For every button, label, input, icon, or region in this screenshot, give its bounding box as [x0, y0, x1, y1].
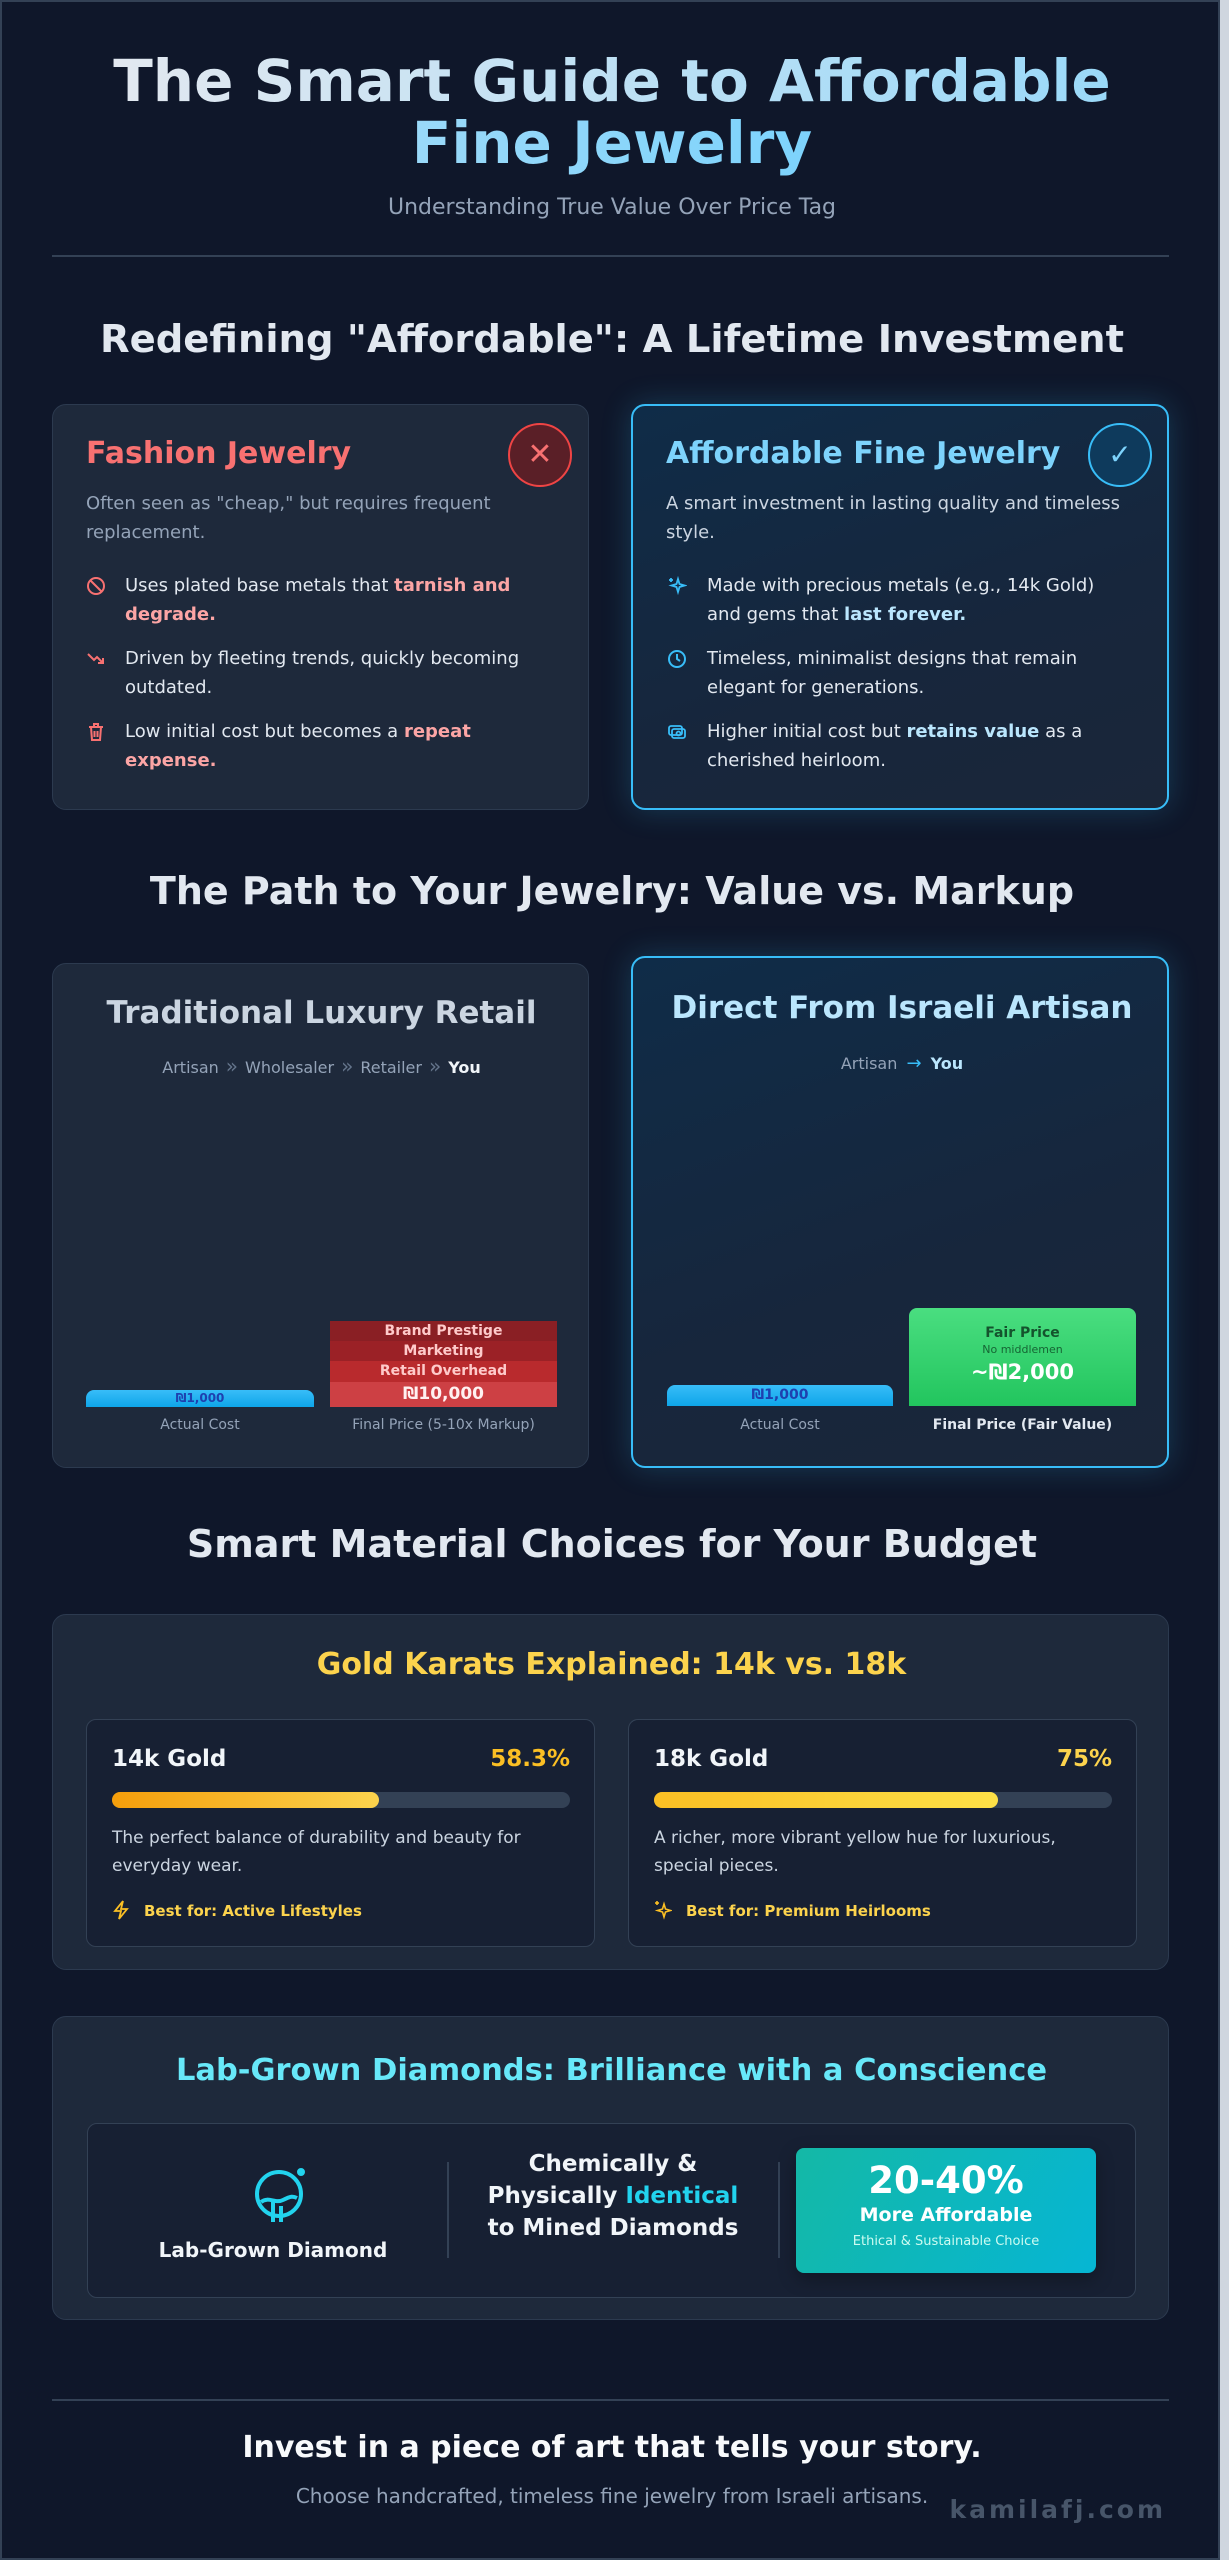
- panel: direct from artisan: [631, 956, 1169, 1468]
- card: 14k: 58.3%: [490, 1746, 570, 1772]
- bar: final price stack: ₪10,000: [403, 1384, 484, 1404]
- card: 14k: 14k Gold: [112, 1746, 226, 1772]
- callout: affordability: Ethical & Sustainable Choice: [853, 2234, 1039, 2249]
- progress bar: [112, 1792, 570, 1808]
- icon label: Lab-Grown Diamond: [159, 2238, 387, 2262]
- bar: actual cost: [86, 1390, 314, 1407]
- bar labels: [160, 1417, 535, 1433]
- bar labels: Final Price (5-10x Markup): [352, 1417, 535, 1433]
- panel: lab-grown diamonds: [52, 2016, 1169, 2320]
- bar: actual cost: [667, 1385, 893, 1406]
- card title: Traditional Luxury Retail: [106, 995, 536, 1031]
- bar: fair price: Fair Price: [985, 1325, 1060, 1341]
- title: The Smart Guide to Affordable: [113, 47, 1111, 115]
- title: Fine Jewelry: [412, 109, 812, 177]
- card title: Direct From Israeli Artisan: [672, 990, 1132, 1026]
- bullet list: Driven by fleeting trends, quickly becoming outdated.: [125, 648, 519, 698]
- bar labels: Final Price (Fair Value): [933, 1417, 1112, 1433]
- subtitle: Understanding True Value Over Price Tag: [388, 195, 836, 220]
- bar: fair price: No middlemen: [982, 1343, 1063, 1356]
- best for: Best for: Premium Heirlooms: [686, 1902, 931, 1920]
- heading: path to jewelry: The Path to Your Jewelry: Value vs. Markup: [150, 869, 1074, 913]
- card: 14k: [86, 1719, 595, 1947]
- panel: fashion jewelry: [52, 404, 589, 810]
- card: 18k: [628, 1719, 1137, 1947]
- title: [113, 47, 1111, 177]
- panel title: Lab-Grown Diamonds: Brilliance with a Conscience: [176, 2053, 1047, 2088]
- card title: Fashion Jewelry: [86, 436, 351, 471]
- description: A smart investment in lasting quality and timeless style.: [666, 493, 1120, 543]
- icon: flask: [255, 2168, 305, 2222]
- identical text: to Mined Diamonds: [488, 2215, 738, 2241]
- bar: final price stack: Brand Prestige: [385, 1323, 502, 1339]
- icon: x circle: ✕: [527, 437, 553, 472]
- bar: actual cost: ₪1,000: [752, 1387, 808, 1403]
- footer headline: Invest in a piece of art that tells your story.: [242, 2430, 982, 2465]
- bullet list: Higher initial cost but retains value as a cherished heirloom.: [707, 721, 1082, 771]
- bullet list: Made with precious metals (e.g., 14k Gold) and gems that last forever.: [707, 575, 1094, 625]
- identical text: Chemically &: [529, 2151, 697, 2177]
- identical text: [488, 2151, 738, 2241]
- bar: actual cost: ₪1,000: [176, 1391, 224, 1405]
- card: 18k: 18k Gold: [654, 1746, 768, 1772]
- bullet list: Low initial cost but becomes a repeat expense.: [125, 721, 471, 771]
- watermark: kamilafj.com: [949, 2495, 1166, 2524]
- panel: affordable fine jewelry: [631, 404, 1169, 810]
- flow: chain: Artisan » Wholesaler » Retailer » You: [162, 1054, 481, 1078]
- panel: gold karats: [52, 1614, 1169, 1970]
- callout: affordability: More Affordable: [860, 2204, 1032, 2226]
- card: 18k: 75%: [1057, 1746, 1112, 1772]
- bar: fair price: ~₪2,000: [971, 1360, 1074, 1384]
- heading: redefining affordable: Redefining "Affordable": A Lifetime Investment: [100, 317, 1124, 362]
- callout: affordability: [796, 2148, 1096, 2273]
- bar: final price stack: Marketing: [403, 1343, 484, 1359]
- footer subtext: Choose handcrafted, timeless fine jewelry from Israeli artisans.: [296, 2484, 928, 2508]
- icon: x circle: [508, 423, 572, 487]
- panel title: Gold Karats Explained: 14k vs. 18k: [317, 1647, 906, 1682]
- bar: final price stack: [330, 1321, 557, 1407]
- icon: check circle: [1088, 423, 1152, 487]
- bar: fair price: [909, 1308, 1136, 1406]
- bar: final price stack: Retail Overhead: [380, 1363, 507, 1379]
- panel: traditional retail: [52, 963, 589, 1468]
- description: Often seen as "cheap," but requires frequent replacement.: [86, 493, 491, 543]
- bullet list: [668, 575, 1094, 771]
- card title: Affordable Fine Jewelry: [666, 436, 1060, 471]
- flow: direct: Artisan → You: [841, 1053, 963, 1074]
- bullet list: [87, 575, 519, 771]
- callout: affordability: 20-40%: [868, 2159, 1024, 2202]
- progress bar: [654, 1792, 1112, 1808]
- bar labels: Actual Cost: [160, 1417, 240, 1433]
- best for: Best for: Active Lifestyles: [144, 1902, 362, 1920]
- card: 14k: The perfect balance of durability and beauty for everyday wear.: [112, 1828, 521, 1876]
- identical text: Physically Identical: [488, 2183, 738, 2209]
- inner box: [87, 2123, 1136, 2298]
- bullet list: Timeless, minimalist designs that remain elegant for generations.: [707, 648, 1077, 698]
- bullet list: Uses plated base metals that tarnish and degrade.: [125, 575, 510, 625]
- bar labels: Actual Cost: [740, 1417, 820, 1433]
- heading: material choices: Smart Material Choices for Your Budget: [187, 1522, 1037, 1566]
- bar labels: [740, 1417, 1112, 1433]
- icon: check circle: ✓: [1108, 438, 1132, 471]
- card: 18k: A richer, more vibrant yellow hue for luxurious, special pieces.: [654, 1828, 1056, 1876]
